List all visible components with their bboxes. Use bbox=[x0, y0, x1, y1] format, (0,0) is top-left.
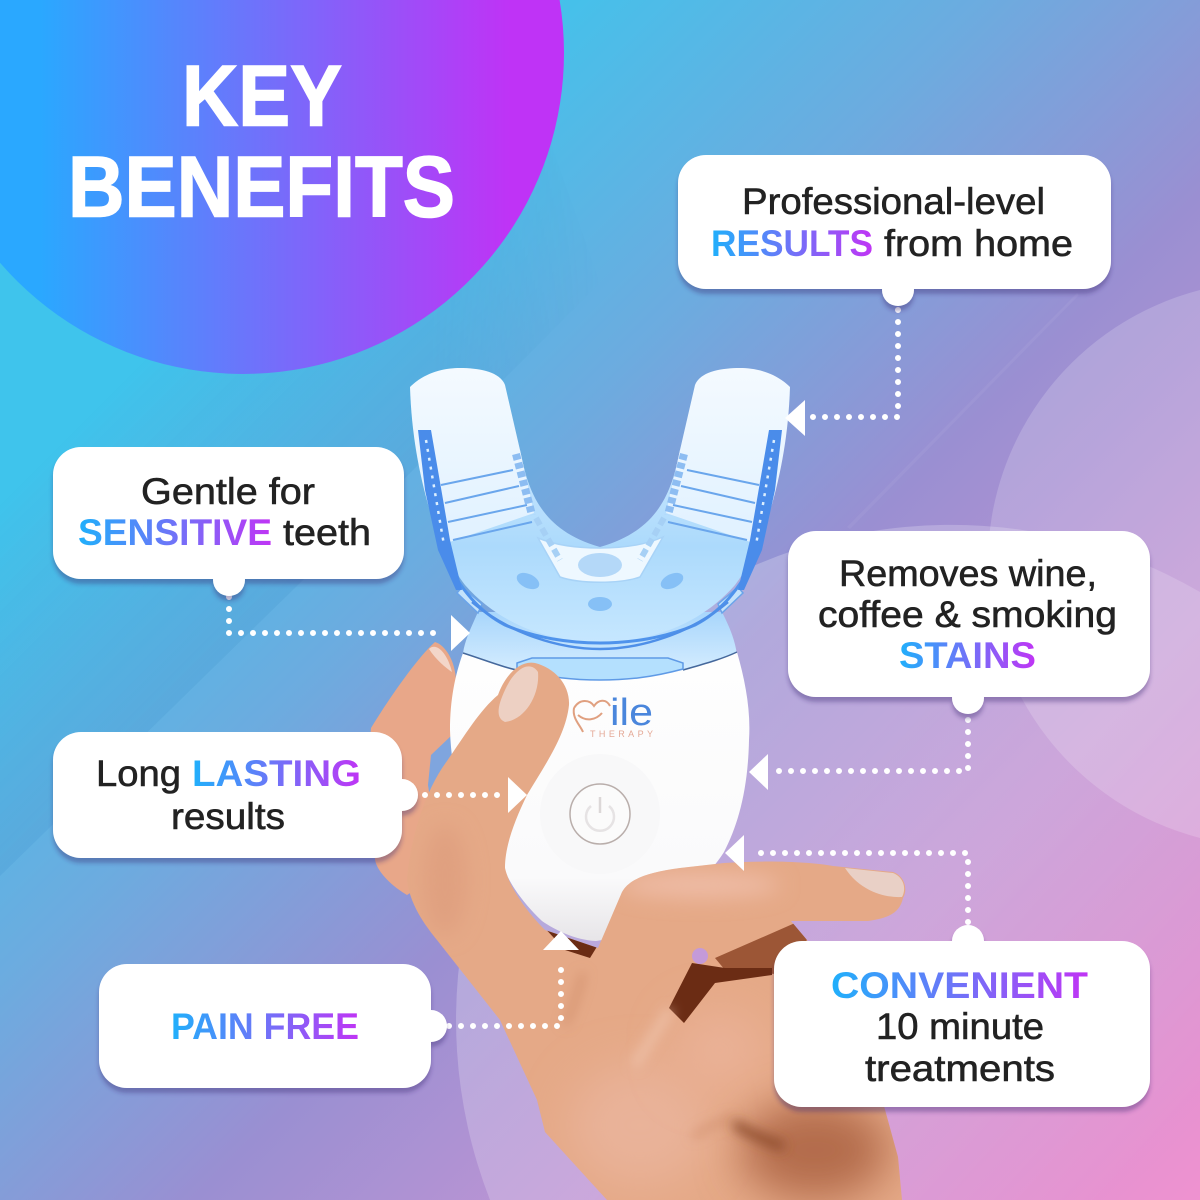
card: stains: Removes wine, bbox=[839, 553, 1097, 594]
tray flange bbox=[457, 587, 743, 613]
card: professional results bbox=[678, 155, 1111, 306]
left wing bbox=[410, 368, 534, 545]
card: professional results: RESULTS bbox=[711, 223, 873, 264]
connector: stains bbox=[749, 720, 968, 790]
brand logo bbox=[574, 692, 653, 739]
card: professional results: from home bbox=[884, 223, 1073, 264]
device body bbox=[450, 652, 749, 941]
title blob bbox=[0, 0, 564, 374]
title bbox=[68, 48, 455, 236]
mouth tray bbox=[410, 368, 790, 649]
card: long lasting: Long bbox=[96, 753, 181, 794]
title: KEY bbox=[182, 48, 342, 144]
card: long lasting: results bbox=[171, 796, 285, 837]
back finger of hand bbox=[370, 642, 456, 895]
power button bbox=[540, 754, 660, 874]
card: sensitive teeth: SENSITIVE bbox=[78, 512, 272, 553]
card: stains: STAINS bbox=[899, 635, 1036, 676]
card: professional results: Professional-level bbox=[742, 181, 1045, 222]
tray gel bbox=[420, 430, 781, 642]
card: long lasting: LASTING bbox=[192, 753, 361, 794]
connector: long lasting bbox=[425, 777, 527, 813]
tray LEDs bbox=[514, 570, 686, 611]
card: long lasting bbox=[53, 732, 418, 858]
card: convenient: treatments bbox=[865, 1048, 1055, 1089]
nails bbox=[499, 666, 538, 722]
device neck bbox=[463, 612, 737, 690]
connector: results bbox=[785, 310, 898, 436]
tray ridges bbox=[418, 430, 782, 590]
hand bbox=[410, 662, 906, 1200]
card: convenient: CONVENIENT bbox=[831, 965, 1088, 1006]
whitening device bbox=[450, 612, 749, 941]
brand logo: THERAPY bbox=[590, 729, 653, 739]
connector: pain free bbox=[449, 931, 579, 1026]
card: pain free bbox=[99, 964, 447, 1088]
card: stains bbox=[788, 531, 1150, 714]
card: sensitive teeth: teeth bbox=[283, 512, 371, 553]
card: convenient bbox=[774, 925, 1150, 1107]
connector: sensitive bbox=[229, 597, 470, 651]
shadow between fingers bbox=[715, 923, 807, 974]
card: convenient: 10 minute bbox=[876, 1006, 1044, 1047]
card: stains: coffee & smoking bbox=[818, 594, 1117, 635]
device recess bbox=[517, 658, 683, 680]
tray inner window bbox=[538, 537, 663, 582]
card: sensitive teeth bbox=[53, 447, 404, 596]
title: BENEFITS bbox=[68, 140, 455, 236]
card: sensitive teeth: Gentle for bbox=[141, 471, 315, 512]
connector: convenient bbox=[725, 835, 968, 922]
right wing bbox=[666, 368, 790, 545]
brand logo: ile bbox=[610, 692, 653, 734]
card: pain free: PAIN FREE bbox=[171, 1006, 359, 1047]
